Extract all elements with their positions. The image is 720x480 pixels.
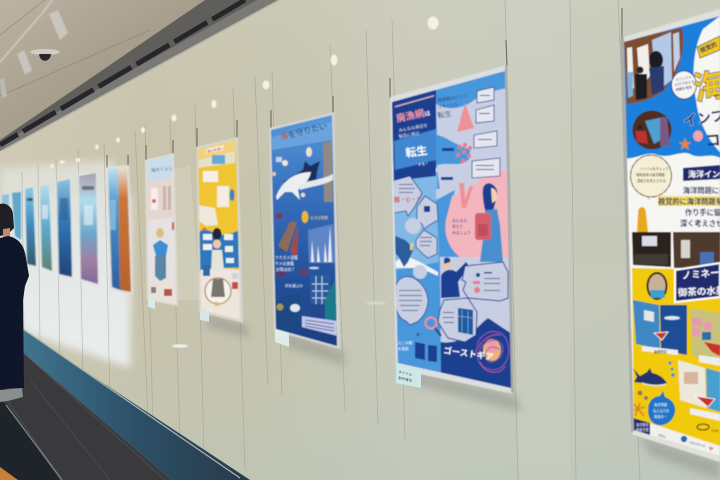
- yellow header: [198, 140, 236, 168]
- pink V: [459, 183, 473, 208]
- thought bubble: インフォをチェック: [640, 166, 669, 171]
- poster A: ghost gear: [385, 60, 515, 395]
- poster C: blue: 対策は何？: [276, 267, 295, 272]
- ceiling lights reflected in wall: [50, 16, 438, 348]
- poster: I artwork: [40, 184, 52, 271]
- wall shadows under posters: [204, 312, 720, 480]
- poster A: ghost gear: 考えて: [452, 224, 463, 229]
- navy label: [633, 418, 650, 435]
- blue bubble: 発信中！: [654, 414, 667, 419]
- yellow character: [637, 198, 650, 232]
- figure: [211, 228, 224, 272]
- blue bubble: [648, 391, 675, 425]
- poster thumbnails 2: [690, 308, 720, 366]
- navy title panel: みんなの身近な: [398, 121, 428, 134]
- lower lavender: [440, 257, 511, 345]
- orange bench corner: [0, 467, 18, 480]
- poster row: distant: [2, 165, 133, 295]
- poster: F (frame): [106, 165, 133, 295]
- right column heading: リサイクル: [437, 101, 459, 111]
- ships: [278, 222, 297, 252]
- magnifier: [426, 318, 441, 336]
- left column: [394, 172, 440, 270]
- thought bubble: 地球全体の海洋問題: [636, 172, 665, 177]
- ceiling: [0, 0, 205, 140]
- yellow ribbon: [697, 36, 720, 58]
- sponsor footer: nifco: [658, 433, 666, 439]
- circle diagram: [205, 278, 231, 308]
- poster A: ghost gear: を徹底: [398, 346, 409, 351]
- left bubbles: [392, 176, 438, 325]
- woman figure: [475, 183, 503, 262]
- circle diagram: 海: [214, 301, 219, 308]
- poster D: yellow: [196, 136, 244, 324]
- poster A: ghost gear: みましょう: [452, 230, 471, 235]
- circle and left man: [405, 218, 421, 234]
- pink blob: [445, 170, 510, 263]
- poster: H artwork: [57, 179, 72, 277]
- sponsor footer: ヤ: [707, 446, 714, 453]
- right column heading: 転生: [437, 109, 452, 120]
- shoes: [0, 388, 23, 402]
- title: [272, 122, 332, 150]
- white bubble: [672, 71, 696, 99]
- chart: 大きな問題: [310, 215, 328, 220]
- photo strip: [632, 232, 720, 268]
- ceiling beam with vents: [0, 0, 279, 151]
- white buttons: [472, 87, 500, 178]
- navy title panel: 転生: [404, 143, 428, 160]
- poster thumbnails 3: [678, 360, 720, 421]
- ghost gear turtle: [475, 331, 509, 372]
- sponsor footer: AQUAPLUS: [689, 440, 706, 448]
- visitor figure looking at posters: [0, 204, 29, 402]
- security camera: [30, 49, 60, 61]
- poster: far L: [2, 194, 9, 205]
- whale: [276, 172, 311, 200]
- yellow badge: [302, 211, 308, 223]
- label card: poster A: タイトル: [398, 369, 413, 377]
- navy title panel: 廃漁網は: [395, 106, 431, 125]
- white bubble: 問題を発見: [675, 84, 693, 92]
- poster: I: [39, 183, 53, 273]
- lavender text box: [302, 316, 338, 336]
- poster C: blue: サメの漁獲: [275, 261, 294, 266]
- poster A: ghost gear: 脱・C・?: [394, 196, 420, 204]
- yellow header: 海の未来へ: [206, 145, 225, 154]
- label card: poster A: [396, 363, 421, 388]
- body copy: [658, 186, 720, 228]
- navy title panel: [392, 89, 436, 181]
- poster E: 海のくらし: [150, 165, 174, 174]
- poster C: blue: ウミガメ混獲: [275, 255, 298, 260]
- navy title panel: 製品に再び: [398, 129, 421, 140]
- label card: poster C: [275, 329, 289, 347]
- poster A: ghost gear: えこの網: [398, 340, 413, 345]
- poster: F artwork, blue half: [108, 168, 120, 290]
- nominated title: [675, 263, 720, 302]
- label card: poster A: 制作者名: [398, 375, 413, 383]
- left lower blue: [395, 262, 441, 374]
- table: [310, 275, 330, 305]
- small blue tags: [442, 148, 454, 151]
- poster: J artwork: [25, 187, 36, 266]
- portrait circle: [646, 272, 668, 300]
- poster: F artwork, orange half: [118, 167, 131, 292]
- title: ghost gear: ゴーストギア: [443, 345, 495, 362]
- right man: [441, 258, 469, 298]
- white bubble: ビジュアル: [675, 74, 693, 82]
- poster: far K: [12, 192, 21, 240]
- lower white area: [199, 268, 241, 320]
- blue band: [198, 230, 241, 274]
- fish and coral: [634, 390, 648, 416]
- starfish and jelly: ★: [678, 136, 692, 152]
- text pill: [683, 165, 720, 181]
- speech bubble diagram: [462, 262, 508, 301]
- right column heading: [437, 94, 466, 118]
- pink triangle: [457, 103, 474, 132]
- poster A: ghost gear: ×: [416, 332, 420, 339]
- yellow ribbon: 視覚的: [699, 40, 718, 55]
- right column lavender: [436, 88, 509, 190]
- blue bubble: 伝える力を: [653, 408, 669, 413]
- navy title panel: する！: [418, 161, 429, 167]
- poster C: blue: 何を選ぶか: [285, 283, 303, 288]
- label card: poster D: [200, 310, 209, 322]
- shark: [283, 161, 320, 186]
- blue header: [620, 10, 720, 158]
- label card: poster E: [148, 298, 155, 309]
- poster C: blue: 海を守りたい: [279, 121, 328, 142]
- white bubble: の力で伝える: [674, 79, 695, 87]
- poster: G: [78, 172, 99, 286]
- ceiling rail and spotlights: [0, 0, 68, 99]
- shark: [633, 368, 667, 386]
- thought bubble: 深刻さを考えさせる: [637, 178, 666, 183]
- yellow section: [632, 268, 720, 458]
- skirting and floor: [0, 328, 250, 480]
- poster thumbnails 1: [633, 300, 687, 355]
- bubbles: [668, 361, 675, 377]
- team photo: [624, 28, 683, 104]
- navy bottom: [440, 318, 512, 392]
- navy label: 海洋教育: [636, 422, 649, 427]
- blue bubble: 海洋問題: [654, 402, 668, 407]
- poster E: [144, 152, 178, 306]
- poster C: blue: [268, 112, 340, 350]
- poster: H: [56, 178, 73, 279]
- pink dots: [456, 143, 472, 163]
- poster thumbnails 1: 最優秀賞: [654, 349, 667, 354]
- poster: J: [24, 186, 37, 268]
- poster A: ghost gear: みんなも: [452, 218, 467, 223]
- hanging wires: [107, 8, 622, 168]
- sponsor footer: TLA: [711, 428, 719, 433]
- thought bubble: [630, 155, 672, 197]
- poster: G artwork: [79, 173, 98, 284]
- chart: [308, 215, 335, 263]
- poster B: ocean infographic contest: [620, 9, 720, 470]
- gray photo panel: [323, 141, 333, 202]
- bubble with grid square: [438, 298, 477, 342]
- right column heading: 廃漁網はどこへ: [437, 92, 467, 104]
- navy label: 推進事業: [636, 427, 650, 432]
- sponsor footer: [650, 423, 720, 460]
- circle photo: [632, 110, 672, 150]
